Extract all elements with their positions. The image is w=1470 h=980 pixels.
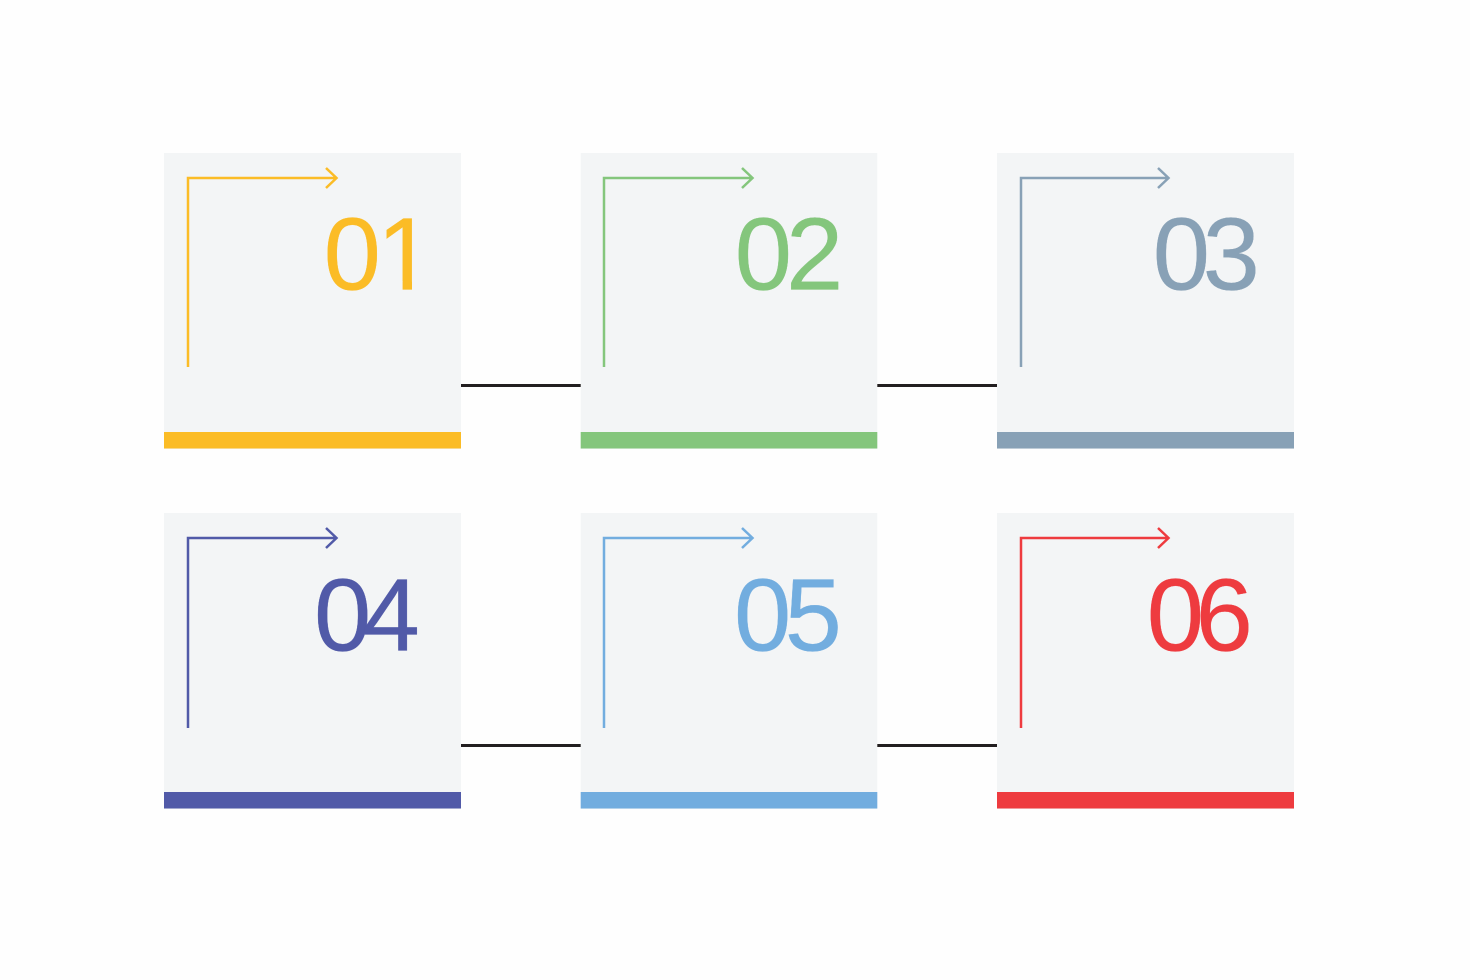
panel: 04: [164, 513, 461, 809]
number: 03: 03: [1153, 196, 1260, 312]
arrow: 06: [1021, 528, 1168, 728]
panel: 03: [997, 153, 1294, 449]
connector: 02 to 03: [877, 384, 997, 387]
number: 01: 01: [324, 196, 434, 312]
arrow: 05: [604, 528, 752, 728]
number: 02: 02: [735, 196, 843, 312]
number: 06: 06: [1147, 558, 1253, 672]
number: 04: 04: [314, 558, 420, 672]
panel: 06: [997, 513, 1294, 809]
number: 05: 05: [734, 558, 842, 672]
arrow: 02: [604, 168, 752, 367]
arrow: 03: [1021, 168, 1168, 367]
arrow: 04: [188, 528, 336, 728]
arrow: 01: [188, 168, 336, 367]
panel: 01: [164, 153, 461, 449]
connector: 01 to 02: [461, 384, 581, 387]
panel: 02: [581, 153, 877, 449]
connector: 04 to 05: [461, 744, 581, 747]
connector: 05 to 06: [877, 744, 997, 747]
panel: 05: [581, 513, 877, 809]
